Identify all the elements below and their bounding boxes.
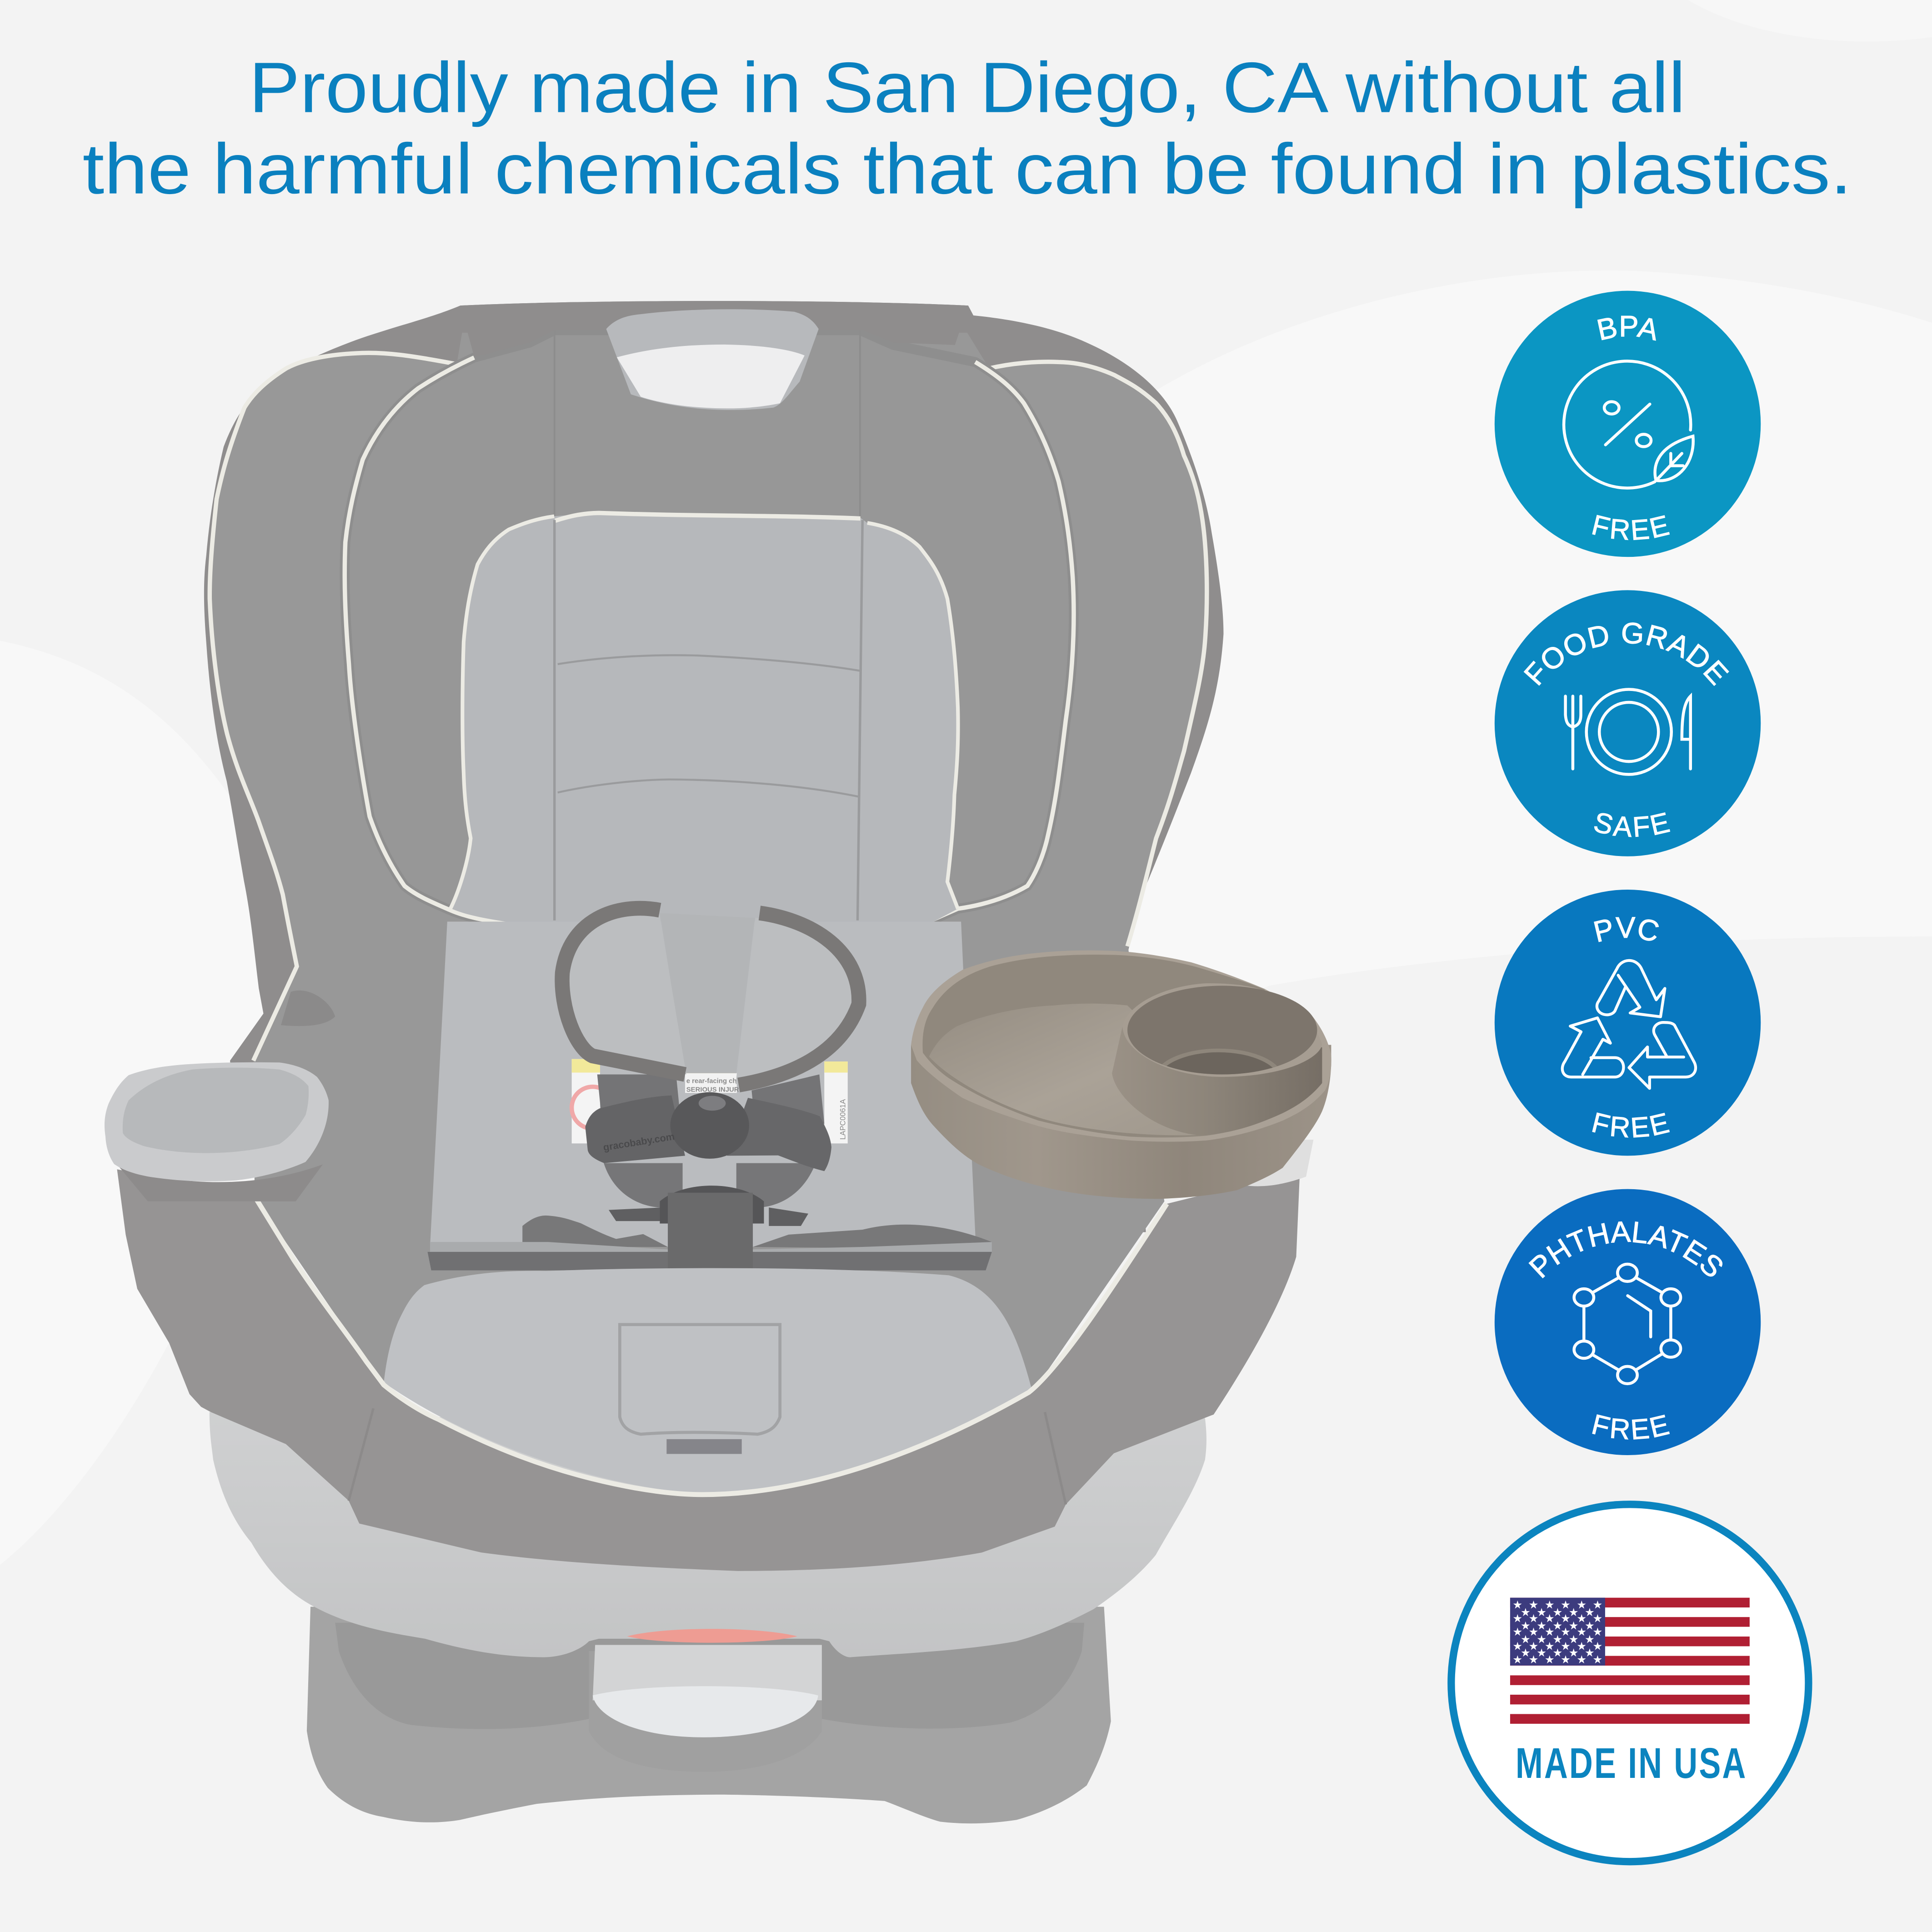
badge: phthalates free [1495,1189,1761,1455]
back and side panels [210,333,1207,1392]
label FREE: FREE [1589,509,1674,546]
label BPA: BPA [1594,310,1662,347]
safety label [572,1041,848,1143]
tray rim [911,951,1331,1142]
seat base [307,1607,1111,1823]
label FREE: FREE [1589,1409,1674,1446]
badge: made in USA [1451,1504,1808,1862]
icon: molecule [1574,1264,1681,1384]
label PHTHALATES: PHTHALATES [1523,1215,1730,1284]
icon: recycle arrows [1562,961,1696,1088]
icon: US flag: ★★★★★★ [1512,1626,1602,1638]
tray interior [922,955,1322,1137]
icon: US flag: ★★★★★★ [1512,1654,1602,1666]
label FOOD GRADE: FOOD GRADE [1517,616,1735,691]
badge: BPA free [1495,291,1761,557]
head wings [345,330,1074,924]
cup holder hole [1127,986,1317,1075]
title [83,48,1852,209]
back shell [204,301,1223,1232]
plastic shell [210,1412,1206,1657]
chest clip [585,1092,831,1171]
safety label: LAPC0061A [839,1099,847,1140]
icon: US flag: ★★★★★ [1521,1607,1595,1619]
cup holder wall [1112,1026,1322,1136]
cup holder floor [1162,1048,1277,1075]
chest clip: gracobaby.com [602,1131,676,1153]
head handle [606,309,819,410]
belt path opening [281,991,335,1026]
tray floor [929,1004,1232,1135]
tray body [911,1045,1331,1199]
badge: food grade safe [1495,590,1761,856]
lower back panel [430,921,976,1247]
seat cushion [384,1268,1032,1495]
outer piping right [989,362,1207,946]
safety label: SERIOUS INJURY [686,1086,743,1093]
title: the harmful chemicals that can be found in plastics. [83,130,1852,209]
label SAFE: SAFE [1591,806,1674,843]
icon: plate and cutlery [1566,690,1691,775]
mesh top band [460,301,968,357]
center back pad [450,513,958,924]
icon: percent leaf [1564,361,1693,488]
icon: US flag: ★★★★★★ [1512,1612,1602,1625]
lower fabric bolster [117,1169,1300,1571]
title: Proudly made in San Diego, CA without all [249,48,1686,128]
cup holder rim [1122,983,1322,1077]
tray mount [1245,1140,1313,1186]
tray [911,951,1331,1199]
safety label: e rear-facing ch [686,1077,737,1085]
icon: US flag: ★★★★★★ [1512,1599,1602,1612]
left cup holder [105,1062,329,1201]
label FREE: FREE [1589,1107,1674,1144]
badge: PVC free [1495,890,1761,1156]
icon: US flag: ★★★★★ [1521,1620,1595,1632]
icon: US flag: ★★★★★★ [1512,1640,1602,1652]
label PVC: PVC [1590,911,1662,949]
outer piping left [210,353,457,1061]
fabric seams [349,1408,1066,1504]
red release lens [627,1629,797,1643]
icon: US flag: ★★★★★ [1521,1633,1595,1646]
icon: US flag: ★★★★★ [1521,1647,1595,1659]
label MADE IN USA: MADE IN USA [1516,1739,1747,1787]
car seat [105,301,1300,1823]
lap and crotch straps [428,1163,992,1273]
shoulder straps [562,908,859,1124]
icon: US flag [1510,1598,1750,1724]
lower piping [255,1196,1167,1495]
